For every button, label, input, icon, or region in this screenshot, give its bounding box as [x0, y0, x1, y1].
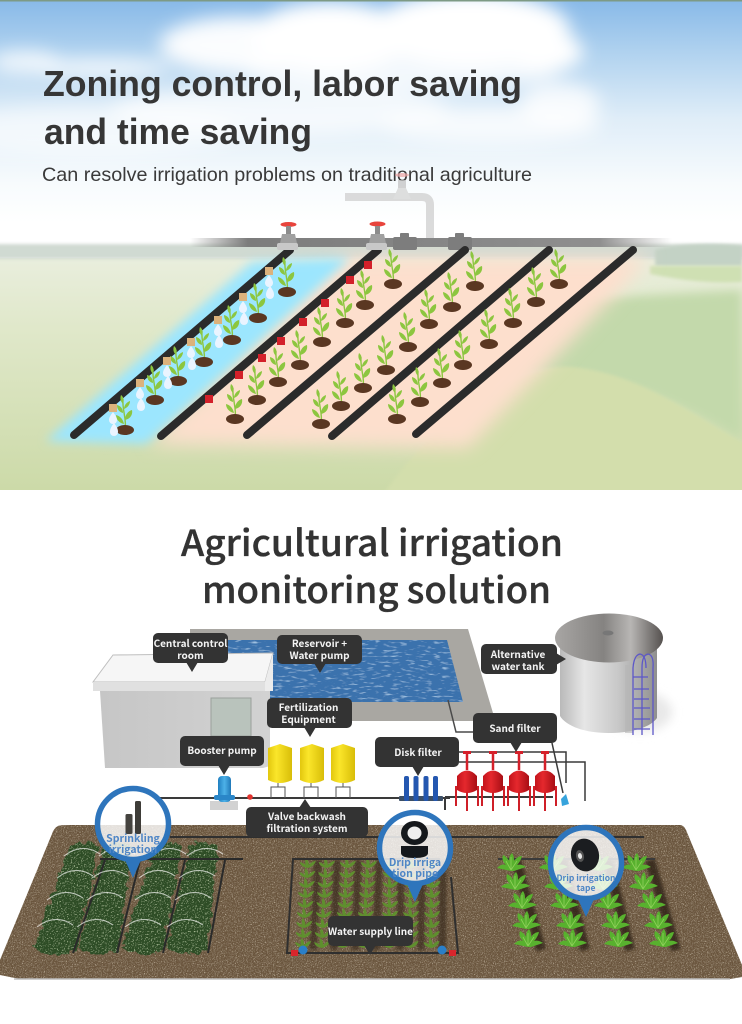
drip emitters and water drops — [109, 267, 274, 436]
label: fertilization equipment — [267, 698, 352, 737]
label: disk filter: Disk filter — [394, 744, 442, 759]
reservoir outlet pipe — [448, 700, 475, 732]
booster pump — [210, 776, 253, 810]
drip tape section — [497, 853, 678, 950]
heading: monitoring solution — [181, 515, 563, 614]
label: sand filter — [473, 713, 557, 752]
sand filter tanks — [456, 751, 556, 811]
label: disk filter — [375, 737, 459, 776]
plants in unirrigated zone — [226, 249, 568, 429]
callout: drip irrigation tape: tape — [577, 882, 595, 894]
label: central control room — [153, 633, 228, 672]
unirrigated zone: peach — [150, 258, 650, 448]
drip lines — [74, 250, 633, 436]
label: central control room: room — [177, 647, 204, 662]
main pipe — [190, 238, 672, 247]
valve left — [277, 222, 298, 250]
irrigated zone: blue — [46, 258, 350, 444]
callout: drip irrigation pipe: Drip irriga — [389, 855, 441, 870]
label: water supply line — [328, 916, 413, 955]
callout: drip irrigation tape — [550, 828, 622, 917]
fertilizer tanks — [268, 744, 355, 798]
label: booster pump: Booster pump — [187, 742, 257, 757]
label: valve backwash filtration system: Valve backwash — [267, 808, 346, 823]
upper water pipe with valve — [345, 173, 430, 240]
farmland background — [0, 244, 742, 500]
label: booster pump — [180, 736, 264, 775]
main supply line — [160, 797, 553, 810]
label: reservoir and water pump — [277, 635, 362, 673]
title: and time saving — [44, 111, 312, 152]
callout: drip irrigation pipe — [380, 812, 450, 902]
callout: sprinkling irrigation: Sprinkling — [106, 831, 161, 846]
water tank — [555, 614, 672, 735]
label: fertilization equipment: Equipment — [281, 711, 336, 726]
callout: sprinkling irrigation: irrigation — [109, 842, 157, 857]
label: water supply line: Water supply line — [328, 923, 413, 938]
label: sand filter: Sand filter — [489, 720, 541, 735]
control room building — [93, 653, 273, 768]
subtitle: Can resolve irrigation problems on traditional agriculture — [42, 164, 532, 186]
callout: sprinkling irrigation — [98, 788, 168, 878]
sand filter pipes — [459, 743, 585, 801]
callout: drip irrigation pipe: tion pipe — [392, 866, 438, 881]
callout: drip irrigation tape: Drip irrigation — [556, 872, 616, 884]
red closed emitters — [205, 261, 372, 403]
white lower section — [0, 490, 742, 1024]
label: reservoir and water pump: Water pump — [289, 647, 350, 662]
label: reservoir and water pump: Reservoir + — [292, 635, 347, 650]
pipe couplers — [393, 233, 472, 250]
title: Zoning control, labor saving — [43, 63, 522, 104]
heading: monitoring solution: monitoring solution — [202, 562, 551, 614]
label: alternative water tank: Alternative — [490, 646, 545, 661]
label: valve backwash filtration system: filtration system — [267, 820, 347, 835]
title — [43, 63, 522, 152]
plants in irrigated zone — [116, 257, 296, 435]
valve right — [366, 222, 387, 250]
sprinkling section — [34, 842, 243, 955]
heading: monitoring solution: Agricultural irrigation — [181, 515, 563, 567]
label: valve backwash filtration system — [246, 799, 368, 837]
sky background — [0, 0, 742, 262]
label: alternative water tank — [481, 644, 566, 674]
reservoir — [190, 629, 493, 721]
field — [0, 825, 742, 979]
label: fertilization equipment: Fertilization — [279, 699, 338, 714]
label: alternative water tank: water tank — [491, 658, 545, 673]
label: central control room: Central control — [154, 635, 227, 650]
drip pipe section — [287, 858, 458, 956]
disk filter units — [399, 776, 443, 801]
field supply pipes — [170, 836, 644, 838]
backwash pump — [561, 794, 569, 806]
